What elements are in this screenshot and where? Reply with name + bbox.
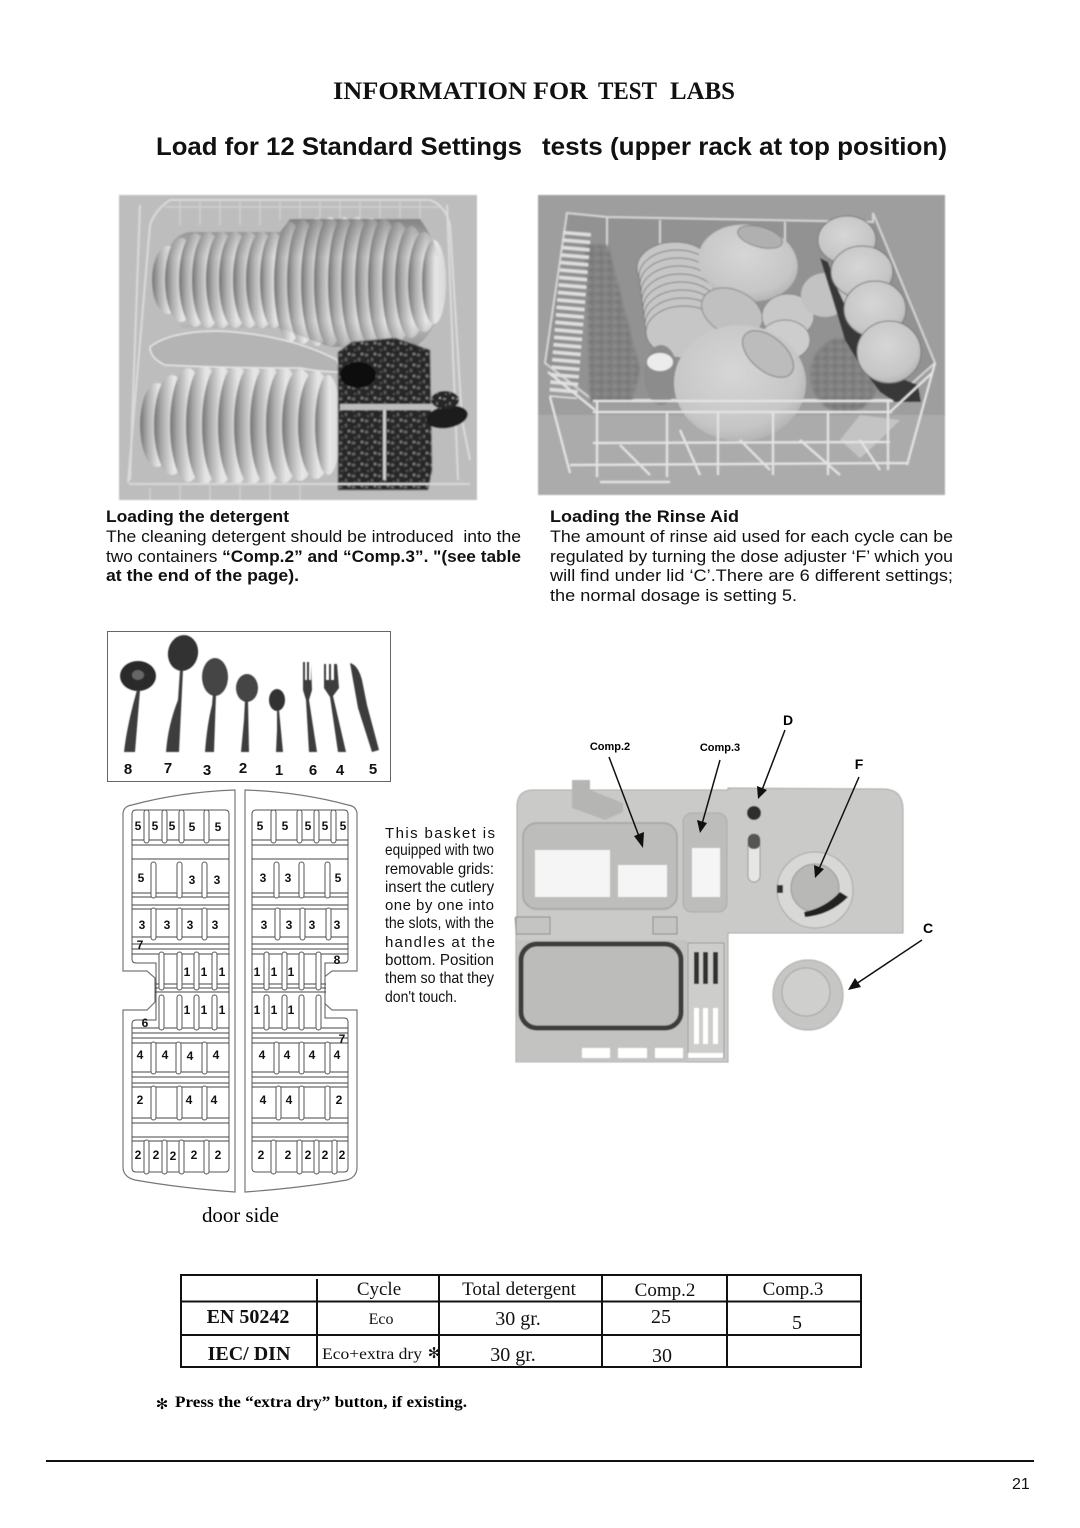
slot numbers: right: 1 <box>288 965 295 979</box>
plates: rear left set <box>152 232 288 328</box>
slot numbers: right: 3 <box>334 918 341 932</box>
label D: D <box>783 712 793 728</box>
text block: basket instructions: This basket is <box>385 825 495 842</box>
slot numbers: left: 1 <box>184 1003 191 1017</box>
compartment 3 <box>683 813 727 912</box>
slot numbers: left: 4 <box>187 1049 194 1063</box>
label Comp.2: Comp.2 <box>590 741 630 753</box>
slot numbers: right: 1 <box>271 965 278 979</box>
title: LABS <box>670 78 735 105</box>
body line 4: the normal dosage is setting 5. <box>550 587 797 605</box>
row: EN 50242: Eco <box>369 1311 393 1328</box>
ladle 8 <box>120 661 156 752</box>
slot panel <box>688 943 724 1058</box>
arrow: C <box>848 940 922 990</box>
slot numbers: left: 4 <box>211 1093 218 1107</box>
row: IEC/DIN: 30 <box>652 1345 672 1367</box>
title: FOR <box>533 78 589 105</box>
top hinge <box>572 780 623 820</box>
rear bowl <box>692 217 804 309</box>
header row: Total detergent <box>462 1279 577 1300</box>
number labels: 8 <box>124 761 132 778</box>
compartment 2 <box>523 823 677 909</box>
title: TEST <box>598 78 657 105</box>
header row: Comp.2 <box>635 1280 695 1301</box>
caption: door side: door side <box>202 1203 279 1227</box>
slot numbers: left: 1 <box>184 965 191 979</box>
header row <box>357 1279 823 1301</box>
row: IEC/DIN: 30 gr. <box>490 1344 536 1366</box>
body line 2: two containers “Comp.2” and “Comp.3”. "(see table <box>106 548 521 566</box>
rear and side wires <box>545 213 935 400</box>
row: EN 50242: 30 gr. <box>495 1308 541 1330</box>
slot numbers: right: 5 <box>340 819 347 833</box>
arrow: Comp.3 <box>697 760 720 833</box>
dispenser body <box>515 788 903 1062</box>
section: loading the rinse aid <box>549 508 953 605</box>
tumbler <box>644 345 678 405</box>
number labels <box>124 760 377 779</box>
slot numbers: left <box>135 819 226 1163</box>
number labels: 4 <box>336 762 345 779</box>
slot numbers: right: 1 <box>271 1003 278 1017</box>
text block: basket instructions: the slots, with the <box>385 915 494 932</box>
slot numbers: right: 4 <box>286 1093 293 1107</box>
right cups <box>818 216 921 383</box>
row: EN 50242: 25 <box>651 1306 671 1328</box>
slot numbers: right: 2 <box>258 1148 265 1162</box>
dose adjuster F <box>777 852 853 928</box>
slot numbers: right: 5 <box>305 819 312 833</box>
diagram: detergent dispenser <box>515 712 933 1062</box>
row: IEC/DIN: IEC/ DIN <box>208 1343 291 1365</box>
spoon 7 <box>165 633 201 752</box>
plates: rear right set <box>274 217 446 347</box>
slot numbers: left: 2 <box>215 1148 222 1162</box>
arrow: D <box>757 730 785 799</box>
slot numbers: right: 4 <box>260 1093 267 1107</box>
row: IEC/DIN: Eco+extra dry <box>322 1346 422 1363</box>
slot numbers: right: 1 <box>254 965 261 979</box>
text block: basket instructions: insert the cutlery <box>385 879 494 896</box>
slot numbers: left: 3 <box>214 873 221 887</box>
slot numbers: left: 1 <box>201 965 208 979</box>
stacked plates <box>637 242 722 358</box>
slot numbers: left: 4 <box>186 1093 193 1107</box>
slot numbers: left: 4 <box>162 1048 169 1062</box>
text block: basket instructions <box>385 825 495 1006</box>
number labels: 3 <box>203 762 211 779</box>
slot numbers: left: 5 <box>215 820 222 834</box>
number labels: 2 <box>239 760 247 777</box>
table: test cycles <box>181 1275 861 1367</box>
coil rack <box>563 232 577 398</box>
slot numbers: right: 7 <box>339 1032 346 1046</box>
knife 5 <box>350 663 379 752</box>
slot numbers: right: 5 <box>282 819 289 833</box>
body line 1: The amount of rinse aid used for each cycle can be <box>550 528 953 546</box>
platter <box>150 331 340 372</box>
slot numbers: right: 5 <box>335 871 342 885</box>
slot numbers: right: 8 <box>334 953 341 967</box>
body line 3: will find under lid ‘C’.There are 6 different settings; <box>549 567 953 585</box>
subtitle <box>156 133 947 161</box>
slot numbers: right: 4 <box>309 1048 316 1062</box>
front wires <box>548 363 935 482</box>
arrow: Comp.2 <box>609 757 644 848</box>
label C: C <box>923 920 933 936</box>
indicator D <box>747 806 761 820</box>
page number: 21 <box>1012 1476 1030 1493</box>
cutlery silhouettes <box>120 633 379 752</box>
fork 4 <box>324 664 346 752</box>
row: EN 50242 <box>207 1306 802 1334</box>
glass cluster <box>810 337 880 413</box>
fork 6 <box>303 662 317 752</box>
hinges <box>516 917 677 934</box>
slot numbers: right: 3 <box>286 918 293 932</box>
slot numbers: right: 4 <box>284 1048 291 1062</box>
slot numbers: left: 1 <box>219 965 226 979</box>
heading: loading the detergent: Loading the detergent <box>106 508 290 526</box>
slot numbers: right: 3 <box>261 918 268 932</box>
slot numbers: right: 5 <box>322 819 329 833</box>
slot numbers: left: 7 <box>137 938 144 952</box>
teaspoon 1 <box>269 689 285 752</box>
slot numbers: left: 5 <box>169 819 176 833</box>
slot numbers: left: 6 <box>142 1016 149 1030</box>
title <box>333 78 735 105</box>
number labels: 7 <box>164 760 172 777</box>
slot numbers: right: 5 <box>257 819 264 833</box>
slot numbers: left: 1 <box>201 1003 208 1017</box>
sight window <box>748 834 760 882</box>
header row: Cycle <box>357 1279 401 1300</box>
slot numbers: left: 2 <box>137 1093 144 1107</box>
slot numbers: right: 3 <box>309 918 316 932</box>
slot numbers: right <box>254 819 347 1162</box>
slot numbers: right: 3 <box>260 871 267 885</box>
spoon 2 <box>236 674 258 752</box>
slot numbers: right: 1 <box>288 1003 295 1017</box>
rack wires front <box>129 483 470 485</box>
header row: Comp.3 <box>763 1279 823 1300</box>
text block: basket instructions: equipped with two <box>385 842 494 859</box>
body line 1: The cleaning detergent should be introduced into the <box>106 528 521 546</box>
slot numbers: left: 5 <box>135 819 142 833</box>
middle cups <box>694 279 770 345</box>
slot numbers: right: 4 <box>334 1048 341 1062</box>
slot numbers: left: 5 <box>189 820 196 834</box>
dark streak <box>820 258 921 402</box>
rack wires behind <box>128 200 470 483</box>
arrow: F <box>814 777 859 878</box>
cap C <box>773 960 843 1030</box>
slot numbers: left: 5 <box>152 819 159 833</box>
slot numbers: left: 3 <box>212 918 219 932</box>
slot numbers: right: 2 <box>339 1148 346 1162</box>
slot numbers: left: 1 <box>219 1003 226 1017</box>
slot numbers: right: 3 <box>285 871 292 885</box>
lid labels <box>582 1048 723 1058</box>
cutlery basket grid: right <box>245 790 357 1192</box>
cutlery basket grid: left <box>123 790 235 1192</box>
slot numbers: left: 5 <box>138 871 145 885</box>
footnote: Press the “extra dry” button, if existing. <box>175 1394 467 1411</box>
title: INFORMATION <box>333 78 527 105</box>
slot numbers: left: 4 <box>137 1048 144 1062</box>
subtitle: Load for 12 Standard Settings <box>156 133 522 161</box>
text block: basket instructions: them so that they <box>385 970 494 987</box>
number labels: 5 <box>369 761 377 778</box>
row: IEC/DIN <box>208 1343 672 1367</box>
slot numbers: right: 2 <box>305 1148 312 1162</box>
slot numbers: right: 2 <box>336 1093 343 1107</box>
heading: loading the rinse aid: Loading the Rinse Aid <box>550 508 739 526</box>
text block: basket instructions: don't touch. <box>385 989 457 1006</box>
slot numbers: right: 1 <box>254 1003 261 1017</box>
text block: basket instructions: removable grids: <box>385 861 494 878</box>
lid with gasket <box>517 940 687 1062</box>
subtitle: tests (upper rack at top position) <box>542 133 947 161</box>
cutlery basket <box>338 338 432 490</box>
slot numbers: right: 2 <box>322 1148 329 1162</box>
slot numbers: left: 2 <box>135 1148 142 1162</box>
photo: lower rack loaded with plates and cutlery <box>119 195 477 500</box>
slot numbers: left: 4 <box>213 1048 220 1062</box>
slot numbers: left: 3 <box>164 918 171 932</box>
slot numbers: left: 2 <box>191 1148 198 1162</box>
text block: basket instructions: bottom. Position <box>385 952 494 969</box>
label F: F <box>855 756 864 772</box>
slot numbers: left: 3 <box>189 873 196 887</box>
label Comp.3: Comp.3 <box>700 742 740 754</box>
slot numbers: left: 3 <box>139 918 146 932</box>
text block: basket instructions: handles at the <box>385 934 495 951</box>
body line 2: regulated by turning the dose adjuster ‘F’ which you <box>550 548 953 566</box>
body line 3: at the end of the page). <box>106 567 299 585</box>
number labels: 6 <box>309 762 317 779</box>
panel: cutlery key <box>108 632 390 782</box>
front bowl <box>674 325 806 441</box>
glasses row <box>585 245 640 402</box>
section: loading the detergent <box>106 508 521 585</box>
serving spoons <box>340 362 376 388</box>
plates: front set <box>140 365 341 485</box>
footnote: ✻ <box>156 1395 168 1413</box>
text block: basket instructions: one by one into <box>385 897 494 914</box>
slot numbers: right: 2 <box>285 1148 292 1162</box>
row: IEC/DIN: ✻ <box>428 1344 440 1362</box>
slot numbers: left: 2 <box>153 1148 160 1162</box>
slot numbers: left: 2 <box>170 1149 177 1163</box>
slot numbers: left: 3 <box>187 918 194 932</box>
row: EN 50242: EN 50242 <box>207 1306 289 1328</box>
photo: upper rack loaded with bowls and cups <box>538 195 945 495</box>
slot numbers: right: 4 <box>259 1048 266 1062</box>
row: EN 50242: 5 <box>792 1312 802 1334</box>
number labels: 1 <box>275 762 283 779</box>
spoon 3 <box>202 658 228 752</box>
